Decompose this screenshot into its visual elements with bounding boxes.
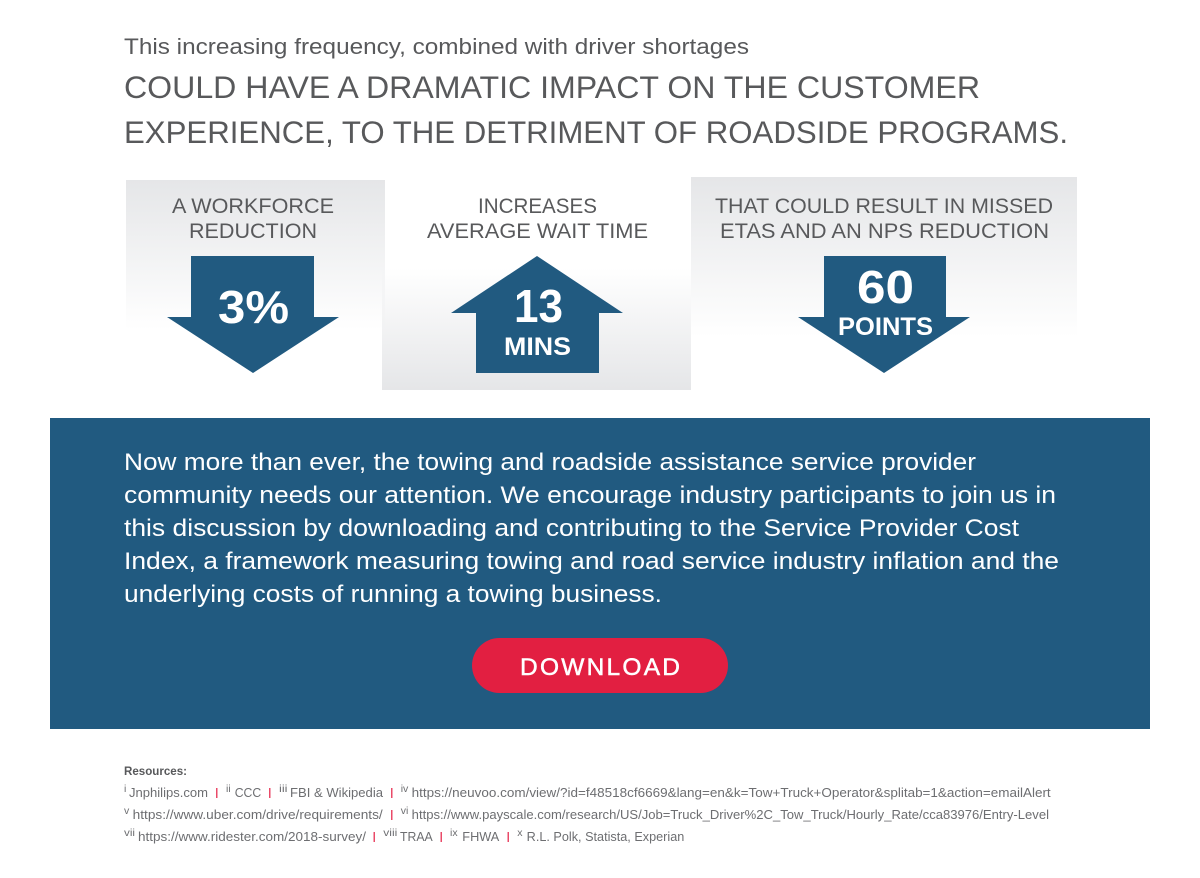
stat: 60 points [838,261,933,341]
panel heading [715,194,1053,243]
headline: EXPERIENCE, TO THE DETRIMENT OF ROADSIDE PROGRAMS. [124,114,1068,150]
resources line 3: x [517,827,523,839]
panel heading: A WORKFORCE [172,194,334,218]
call to action text: Now more than ever, the towing and roadside assistance service provider [124,449,976,476]
resources line 1: iii [279,783,288,795]
resources line 1: ii [226,783,231,795]
panel heading: THAT COULD RESULT IN MISSED [715,194,1053,218]
resources footnotes [124,766,1051,844]
panel heading: ETAS AND AN NPS REDUCTION [720,219,1049,243]
download button [472,638,728,693]
icon: down arrow [167,256,339,373]
intro line: This increasing frequency, combined with driver shortages [124,34,749,59]
resources line 3: vii [124,827,135,839]
resources line 3: TRAA [400,830,433,844]
panel heading: INCREASES [478,194,597,218]
stat: 13 mins: 13 [514,280,563,332]
resources line 3: R.L. Polk, Statista, Experian [527,830,684,844]
panel: missed ETAs and NPS reduction [691,177,1077,373]
panel: workforce reduction [126,180,385,373]
call to action text [124,449,1059,608]
resources line 1: iv [401,783,409,795]
call to action text: community needs our attention. We encourage industry participants to join us in [124,482,1056,509]
call to action text: this discussion by downloading and contributing to the Service Provider Cost [124,515,1019,542]
panel heading: REDUCTION [189,219,317,243]
stat: 60 points: POINTS [838,313,933,341]
resources line 1 [124,783,1051,800]
download button: DOWNLOAD [520,654,680,681]
resources line 2: vi [401,805,408,817]
panel heading: AVERAGE WAIT TIME [427,219,648,243]
stat: 13 mins [504,280,571,361]
icon: down arrow [798,256,970,373]
stat: 60 points: 60 [857,261,914,313]
stat: 3%: 3% [218,281,289,333]
resources line 1: FBI & Wikipedia [290,786,383,800]
resources line 3: viii [383,827,397,839]
resources line 3 [124,827,684,844]
call to action text: underlying costs of running a towing business. [124,581,662,608]
resources line 2: v [124,805,130,817]
resources line 1: https://neuvoo.com/view/?id=f48518cf6669&lang=en&k=Tow+Truck+Operator&splitab=1&action=emailAlert [412,786,1051,800]
resources line 2 [124,805,1049,822]
panel heading [172,194,334,243]
resources label: Resources: [124,766,187,778]
resources line 1: Jnphilips.com [129,786,208,800]
stat: 13 mins: MINS [504,333,571,361]
headline: COULD HAVE A DRAMATIC IMPACT ON THE CUSTOMER [124,69,980,105]
panel: call to action [50,418,1150,729]
resources line 3: https://www.ridester.com/2018-survey/ [138,830,367,844]
resources line 1: i [124,783,126,795]
resources line 3: ix [450,827,458,839]
panel: average wait time [382,194,691,390]
resources line 2: https://www.uber.com/drive/requirements/ [133,808,383,822]
heading block [124,34,1068,150]
panel heading [427,194,648,243]
resources line 3: FHWA [462,830,500,844]
headline [124,69,1068,150]
icon: up arrow [451,256,623,373]
resources line 2: https://www.payscale.com/research/US/Job=Truck_Driver%2C_Tow_Truck/Hourly_Rate/cca83976/Entry-Level [412,808,1049,822]
call to action text: Index, a framework measuring towing and road service industry inflation and the [124,548,1059,575]
resources line 1: CCC [235,786,261,800]
